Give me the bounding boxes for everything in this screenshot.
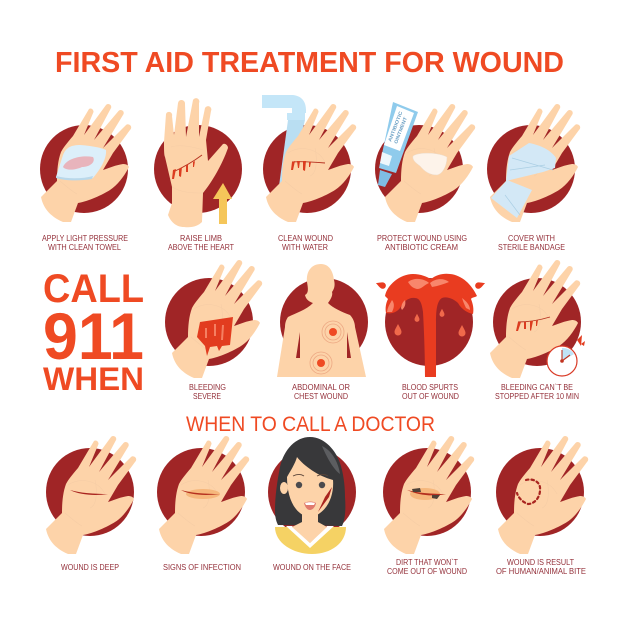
heading: call 911 when: CALL — [43, 267, 144, 311]
panel: blood spurts — [375, 274, 486, 401]
icon: bite marks — [517, 479, 540, 504]
wound marker: chest — [322, 321, 344, 343]
side drops — [375, 280, 387, 290]
falling drops — [394, 309, 466, 336]
panel: bleeding not stopped — [490, 260, 585, 401]
caption — [498, 234, 565, 252]
caption: COVER WITH — [508, 234, 555, 243]
icon: ointment tube — [378, 102, 418, 187]
caption: STERILE BANDAGE — [498, 243, 565, 252]
wound — [291, 161, 325, 171]
icon: ointment tube: ANTIBIOTIC — [387, 110, 405, 143]
panel: wound is deep — [46, 436, 136, 572]
icon: cream — [413, 153, 447, 175]
wound — [318, 487, 332, 512]
caption: SEVERE — [193, 392, 221, 401]
panel: wound on the face — [268, 437, 356, 572]
wound marker: abdomen — [310, 352, 332, 374]
caption: OF HUMAN/ANIMAL BITE — [496, 567, 586, 576]
caption — [292, 383, 350, 401]
caption: WOUND ON THE FACE — [273, 563, 351, 572]
caption: PROTECT WOUND USING — [377, 234, 467, 243]
caption — [496, 558, 586, 576]
wound — [407, 488, 446, 500]
caption: WOUND IS RESULT — [507, 558, 574, 567]
caption: OUT OF WOUND — [402, 392, 459, 401]
caption: BLEEDING CAN`T BE — [501, 383, 573, 392]
caption — [42, 234, 128, 252]
caption: RAISE LIMB — [180, 234, 222, 243]
blood highlights — [387, 279, 470, 312]
icon: raised hand — [164, 98, 228, 227]
caption: WITH CLEAN TOWEL — [48, 243, 122, 252]
icon: up arrow — [213, 183, 232, 224]
caption: CLEAN WOUND — [278, 234, 333, 243]
panel: abdominal or chest wound — [277, 264, 368, 401]
caption: ABOVE THE HEART — [168, 243, 234, 252]
panel: bleeding severe — [165, 260, 262, 401]
heading: call 911 when: WHEN — [43, 361, 144, 397]
caption: STOPPED AFTER 10 MIN — [495, 392, 579, 401]
caption: COME OUT OF WOUND — [387, 567, 467, 576]
caption — [278, 234, 333, 252]
icon: water stream — [279, 120, 305, 186]
caption: SIGNS OF INFECTION — [163, 563, 241, 572]
caption: BLOOD SPURTS — [402, 383, 458, 392]
caption: WITH WATER — [282, 243, 328, 252]
caption: CHEST WOUND — [294, 392, 348, 401]
icon: torso — [277, 264, 366, 377]
caption: WOUND IS DEEP — [61, 563, 119, 572]
heading: call 911 when — [43, 267, 144, 397]
caption — [189, 383, 226, 401]
wound — [181, 489, 220, 499]
heading: when to call a doctor: WHEN TO CALL A DOCTOR — [186, 413, 435, 436]
caption: BLEEDING — [189, 383, 226, 392]
panel: dirt in wound — [383, 436, 474, 576]
icon: blood spurt — [385, 274, 477, 377]
icon: faucet — [262, 95, 306, 120]
panel: protect wound — [375, 102, 475, 252]
icon: towel — [56, 145, 106, 180]
title: FIRST AID TREATMENT FOR WOUND — [55, 47, 564, 79]
panel: apply light pressure — [40, 104, 131, 252]
wound — [197, 317, 233, 356]
icon: bandage — [491, 143, 556, 218]
caption: APPLY LIGHT PRESSURE — [42, 234, 128, 243]
icon: ointment tube: OINTMENT — [393, 116, 409, 145]
icon: woman — [275, 437, 346, 554]
icon: timer — [547, 335, 585, 376]
caption: DIRT THAT WON`T — [396, 558, 458, 567]
arm gaps — [296, 332, 351, 358]
panel: bite wound — [496, 436, 588, 576]
caption: ANTIBIOTIC CREAM — [385, 243, 458, 252]
heading: call 911 when: 911 — [43, 299, 144, 373]
wound — [70, 490, 108, 495]
caption — [402, 383, 459, 401]
wound — [172, 155, 202, 179]
panel: clean wound — [262, 95, 356, 252]
caption — [168, 234, 234, 252]
panel: signs of infection — [157, 436, 249, 572]
wound — [516, 317, 550, 331]
caption: ABDOMINAL OR — [292, 383, 350, 392]
caption — [387, 558, 467, 576]
caption — [377, 234, 467, 252]
caption — [495, 383, 579, 401]
panel: raise limb — [154, 98, 242, 252]
panel: cover with bandage — [487, 104, 580, 252]
